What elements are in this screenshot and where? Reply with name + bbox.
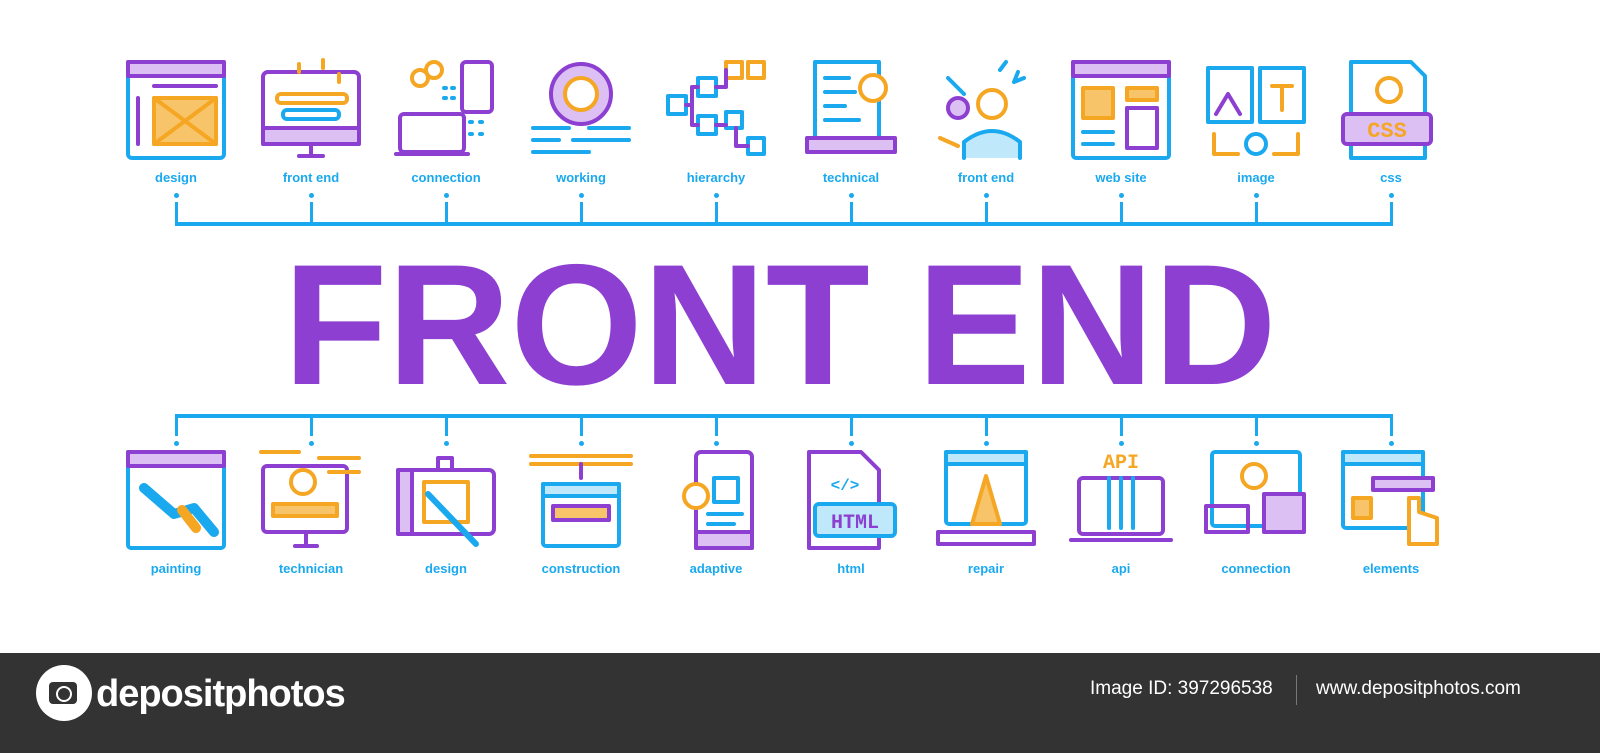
icon: camera [36, 665, 92, 721]
top labels [155, 170, 1402, 185]
bottom labels: repair [968, 561, 1004, 576]
bottom labels: elements [1363, 561, 1419, 576]
bottom ticks [174, 418, 1394, 446]
icon: html: HTML [831, 512, 879, 535]
bottom labels [151, 561, 1419, 576]
top labels: hierarchy [687, 170, 745, 185]
top ticks [174, 193, 1394, 222]
icon: elements [1341, 450, 1439, 546]
bottom labels: html [837, 561, 865, 576]
bottom labels: technician [279, 561, 343, 576]
top labels: design [155, 170, 197, 185]
icon: repair [936, 450, 1036, 546]
footer logo: depositphotos [96, 673, 345, 715]
icon: css: CSS [1367, 119, 1407, 144]
top connector line [175, 222, 1393, 226]
footer image id: Image ID: 397296538 [1090, 678, 1273, 699]
top labels: front end [283, 170, 339, 185]
icon: connection laptops [1204, 450, 1306, 534]
top labels: css [1380, 170, 1402, 185]
footer bar [0, 653, 1600, 753]
icon: painting [126, 450, 226, 550]
icon: working [531, 62, 631, 154]
icon: front end [261, 58, 361, 158]
icon: html [807, 450, 897, 550]
icon: hierarchy [666, 60, 766, 156]
icon: adaptive [682, 450, 754, 550]
icon: html: </> [831, 477, 859, 495]
bottom labels: api [1112, 561, 1130, 576]
bottom labels: design [425, 561, 467, 576]
footer url: www.depositphotos.com [1316, 678, 1521, 699]
top labels: image [1237, 170, 1275, 185]
icon: connection [394, 60, 494, 156]
icon: technician [259, 450, 361, 548]
icon: design tablet [396, 456, 496, 547]
icon: web site [1071, 60, 1171, 160]
icon: api [1069, 452, 1173, 542]
icon: front end person [938, 60, 1026, 160]
icon: css [1341, 60, 1433, 160]
top labels: web site [1095, 170, 1147, 185]
bottom labels: painting [151, 561, 201, 576]
top labels: working [556, 170, 606, 185]
bottom connector line [175, 414, 1393, 418]
top labels: technical [823, 170, 879, 185]
icon: technical [805, 60, 897, 154]
top labels: front end [958, 170, 1014, 185]
icon: design [126, 60, 226, 160]
footer logo [36, 665, 345, 721]
title: FRONT END [283, 229, 1277, 421]
icon: image [1206, 66, 1306, 156]
icon: construction [529, 454, 633, 548]
top labels: connection [411, 170, 481, 185]
bottom labels: connection [1221, 561, 1291, 576]
top row icons [126, 58, 1433, 160]
bottom row icons [126, 450, 1439, 550]
bottom labels: adaptive [690, 561, 742, 576]
bottom labels: construction [542, 561, 620, 576]
icon: api: API [1103, 452, 1139, 475]
